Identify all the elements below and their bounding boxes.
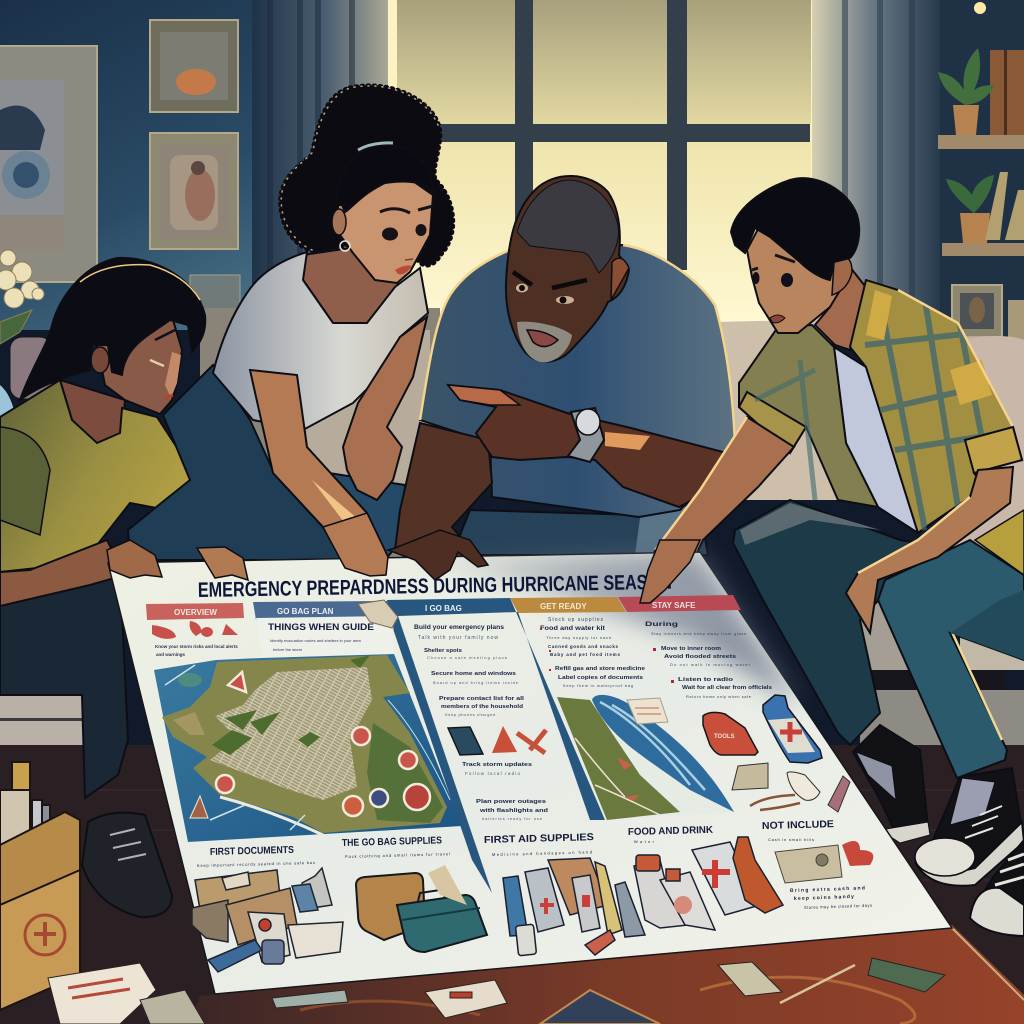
icon: red jerry can: [703, 712, 758, 755]
icon: food and water containers: [634, 837, 783, 930]
panel: bottom section headings: Stores may be closed for days: [804, 903, 872, 910]
poster shadow: [400, 552, 800, 705]
header: orange section: [510, 597, 626, 613]
panel: column 5 checklist: [645, 622, 772, 699]
panel: column 5 checklist: During: [645, 622, 679, 628]
hair curl highlights: [281, 86, 438, 250]
panel: column 5 checklist: Return home only when safe: [686, 694, 752, 699]
man facial features: [513, 272, 587, 304]
panel: column 3 checklist: Plan power outages: [476, 799, 546, 805]
girl hair shine: [80, 265, 200, 300]
panel: column 3 checklist: members of the household: [441, 704, 523, 710]
panel: map heading box: [256, 616, 394, 657]
boy near leg: [733, 500, 930, 745]
poster title: EMERGENCY PREPARDNESS DURING HURRICANE SEASON: [198, 571, 672, 602]
girl shoe: [82, 813, 172, 917]
boy plaid shirt: [850, 280, 1024, 533]
leg rim light: [952, 632, 1002, 740]
right sleeve cuff: [965, 427, 1022, 473]
panel: bottom section headings: keep coins handy: [794, 894, 854, 902]
floor: [0, 745, 1024, 1024]
girl shirt: [0, 380, 198, 572]
hands on poster: [107, 513, 700, 603]
girl sleeve shadow: [0, 427, 50, 535]
panel: column 4 checklist: Food and water kit: [540, 626, 605, 632]
girl eye and mouth: [150, 330, 175, 398]
woman shirt: [213, 252, 428, 430]
map: [154, 654, 462, 842]
header: blue section: GO BAG PLAN: [277, 607, 334, 616]
boy shirt left panel: [739, 325, 878, 507]
icon: first aid items: [503, 858, 645, 956]
girl arm far: [167, 487, 247, 560]
man hair: [517, 180, 619, 273]
panel: column 4 checklist: Refill gas and store medicine: [555, 666, 645, 672]
girl hair: [20, 258, 205, 400]
left sleeve cuff: [739, 392, 806, 453]
shirt bottom right: [975, 510, 1024, 575]
window: [388, 0, 820, 330]
boy neck: [815, 267, 868, 350]
right curtain: [812, 0, 940, 330]
icon: money and tools: [732, 763, 850, 812]
poster sheet: [108, 552, 952, 994]
person: boy: [645, 178, 1024, 936]
small portrait middle: [150, 133, 238, 249]
man far arm: [395, 423, 492, 580]
header: blue section: [253, 601, 390, 620]
man pants: [452, 510, 708, 555]
panel: map heading box: THINGS WHEN GUIDE: [268, 622, 374, 632]
watch: [568, 408, 604, 462]
arm rim: [655, 417, 747, 550]
person: man: [395, 176, 735, 580]
panel: column 3 checklist: Talk with your family now: [418, 635, 498, 641]
second sneaker: [970, 840, 1024, 936]
panel: bottom section headings: Pack clothing and small items for travel: [345, 851, 450, 859]
panel: bottom section headings: NOT INCLUDE: [762, 819, 834, 832]
panel: column 5 checklist: Stay indoors and keep away from glass: [651, 631, 746, 636]
boy far arm: [846, 467, 1013, 633]
patterned rug: [190, 925, 1024, 1024]
panel: bottom section headings: FOOD AND DRINK: [628, 825, 714, 838]
woman far arm and hand: [343, 317, 427, 500]
woman facial features: [380, 206, 433, 274]
small portrait top: [150, 20, 238, 112]
man pointing arm: [448, 385, 727, 507]
header: crimson section: [618, 595, 741, 612]
framed pictures: [0, 20, 240, 310]
girl neck: [60, 380, 125, 445]
panel: column 3 checklist: Follow local radio: [465, 771, 520, 776]
girl jeans: [0, 570, 128, 798]
panel: column 3 checklist: Secure home and windows: [431, 671, 516, 677]
panel: column 5 checklist: Wait for all clear from officials: [682, 685, 772, 691]
headband: [358, 143, 393, 150]
plaid yellow squares: [866, 290, 992, 405]
woman neck and chest: [303, 248, 400, 323]
panel: bottom section headings: THE GO BAG SUPPLIES: [342, 835, 442, 849]
blue column band: [387, 598, 605, 893]
sofa: [0, 308, 1024, 750]
panel: warning shapes: [152, 621, 238, 657]
panel: column 3 checklist: Board up and bring items inside: [433, 680, 519, 685]
woman jeans: [128, 365, 350, 560]
plaid lines: [864, 305, 990, 531]
finger: [448, 385, 520, 405]
icon: cash and heart: [775, 841, 873, 883]
woman top hair: [337, 145, 434, 212]
panel: column 3 checklist: Shelter spots: [424, 648, 462, 654]
boy hair: [731, 178, 859, 280]
poster: [108, 552, 952, 994]
person: woman: [128, 86, 453, 573]
header: red section: OVERVIEW: [174, 608, 217, 617]
crumpled paper on poster: [358, 600, 398, 628]
shirt rim: [898, 290, 1013, 427]
arm light: [312, 480, 378, 555]
panel: column 5 checklist: Move to inner room: [661, 646, 721, 652]
panel: column 4 checklist: Baby and pet food items: [550, 652, 620, 657]
icon: cardboard boxes and documents: [192, 868, 343, 972]
panel: bottom section headings: FIRST DOCUMENTS: [210, 845, 294, 858]
icon: water bottle with cross: [763, 695, 822, 763]
large hurricane painting: [0, 46, 97, 282]
right leg thigh side: [950, 590, 1024, 660]
panel: bottom section headings: Keep important records sealed in one safe box: [197, 860, 315, 868]
panel: bottom section headings: Bring extra cash and: [790, 885, 865, 894]
panel: column 4 checklist: [540, 617, 645, 688]
panel: bottom section headings: Cash in small bills: [768, 837, 814, 842]
papers and money on floor: [48, 958, 945, 1024]
icon: red jerry can: TOOLS: [714, 734, 735, 740]
icons: tablet triangle cross: [448, 726, 546, 755]
girl ear: [91, 347, 109, 373]
man beard: [517, 322, 572, 362]
panel: map heading box: Identify evacuation routes and shelters in your area: [270, 638, 361, 643]
panel: column 3 checklist: Keep phones charged: [445, 712, 495, 717]
panel: column 5 checklist: Listen to radio: [678, 677, 734, 683]
man head: [506, 176, 629, 362]
left curtain: [252, 0, 388, 320]
column 3 header: I GO BAG: [425, 604, 462, 613]
boy tee: [834, 347, 918, 533]
panel: column 5 checklist: Avoid flooded streets: [664, 654, 736, 660]
right shelves with plants and books: [938, 2, 1024, 340]
white flowers: [0, 250, 44, 344]
boy back shoe: [853, 725, 928, 842]
panel: column 3 checklist: [414, 625, 548, 821]
panel: column 4 checklist: Three day supply for each: [546, 635, 611, 640]
woman face: [336, 172, 433, 283]
header: crimson section: STAY SAFE: [652, 601, 696, 610]
panel: column 3 checklist: Choose a safe meeting place: [427, 655, 508, 660]
girl face: [97, 310, 182, 414]
icon: suitcases: [356, 873, 487, 952]
girl cheek light: [165, 352, 181, 398]
man shirt: [420, 245, 735, 517]
forearm light: [605, 432, 650, 450]
panel: column 5 checklist: Do not walk in moving water: [670, 662, 751, 667]
cardboard supply box: [0, 762, 80, 1010]
panel: bottom section headings: Medicine and bandages on hand: [492, 849, 592, 857]
panel: column 4 checklist: Canned goods and snacks: [548, 644, 618, 649]
panel: warning shapes: and warnings: [156, 652, 186, 657]
panel: column 3 checklist: Prepare contact list for all: [439, 696, 525, 702]
boy sneaker: [915, 768, 1024, 886]
boy near arm: [645, 417, 794, 603]
header: orange section: GET READY: [540, 602, 587, 611]
panel: column 3 checklist: batteries ready for use: [482, 816, 543, 821]
panel: column 4 checklist: Stock up supplies: [548, 617, 604, 623]
panel: column 3 checklist: Build your emergency plans: [414, 625, 505, 631]
panel: warning shapes: Know your storm risks and local alerts: [155, 644, 238, 649]
boy far leg: [878, 540, 1024, 778]
man mouth: [527, 330, 558, 347]
panel: column 4 checklist: Keep them in waterproof bag: [563, 683, 633, 688]
woman ear and earring: [332, 209, 350, 251]
panel: bottom section headings: [197, 819, 872, 910]
wave and coast image: [557, 695, 735, 820]
panel: bottom section headings: FIRST AID SUPPLIES: [484, 832, 594, 846]
boy ear: [832, 258, 852, 295]
boy facial features: [752, 255, 795, 323]
panel: column 3 checklist: with flashlights and: [479, 808, 548, 814]
icon: note pin: [428, 865, 467, 905]
man ear: [611, 258, 629, 300]
map markers: [190, 672, 430, 818]
header: red section: [146, 603, 244, 620]
panel: column 4 checklist: Label copies of documents: [558, 675, 643, 681]
panel: bottom section headings: Water: [634, 839, 655, 844]
shirt rim light: [420, 245, 735, 443]
panel: column 3 checklist: Track storm updates: [462, 762, 532, 768]
boy face: [747, 227, 850, 333]
girl arm near: [0, 540, 125, 606]
person: left girl: [0, 258, 247, 917]
woman hair: [281, 86, 453, 265]
panel: map heading box: before the storm: [273, 647, 303, 652]
woman near arm: [250, 370, 388, 573]
